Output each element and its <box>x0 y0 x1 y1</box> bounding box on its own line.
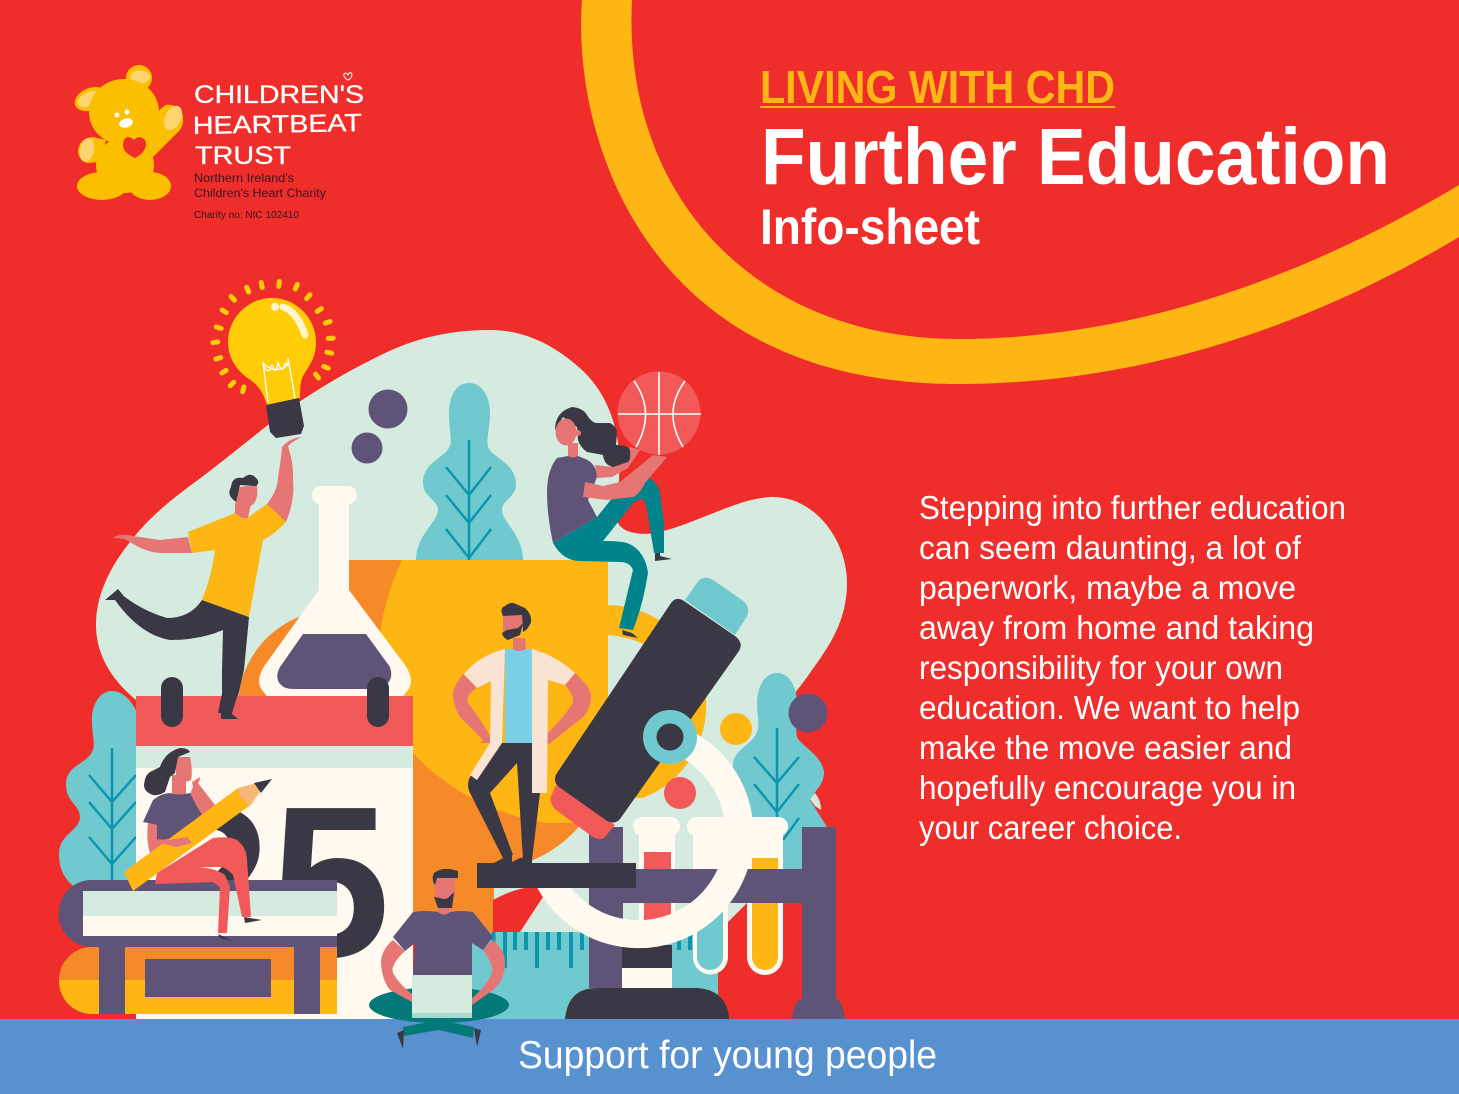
body paragraph: responsibility for your own <box>919 649 1283 686</box>
person: man with laptop <box>369 869 509 1049</box>
plant: right <box>733 673 827 869</box>
yellow half ring <box>608 605 706 798</box>
test tube: red <box>633 817 680 935</box>
floating circles <box>352 390 828 809</box>
microscope tube <box>555 599 741 823</box>
books <box>58 880 337 1014</box>
sub heading: Info-sheet <box>760 199 980 255</box>
body paragraph: can seem daunting, a lot of <box>919 529 1302 566</box>
microscope eyepiece <box>685 578 748 635</box>
test tubes <box>633 817 788 975</box>
red wedge <box>493 887 543 932</box>
bulb rays <box>213 282 333 392</box>
man leg and foot on calendar <box>218 694 238 719</box>
logo wordmark: TRUST <box>195 142 291 170</box>
background blob <box>96 330 847 932</box>
footer label: Support for young people <box>518 1034 937 1077</box>
person: man holding bulb <box>105 437 301 696</box>
person: woman with basketball <box>547 407 672 638</box>
logo wordmark: HEARTBEAT <box>193 109 362 140</box>
basketball <box>618 372 701 455</box>
body paragraph <box>919 489 1346 846</box>
body paragraph: away from home and taking <box>919 609 1314 646</box>
teal ground <box>472 932 718 1019</box>
test tube: teal <box>693 900 728 974</box>
microscope base <box>565 988 729 1019</box>
body paragraph: education. We want to help <box>919 689 1300 726</box>
test tube caps <box>687 817 788 869</box>
microscope focus knob <box>643 710 697 764</box>
plant: far left <box>59 691 140 887</box>
yellow swoosh arc <box>581 0 1459 384</box>
body paragraph: hopefully encourage you in <box>919 769 1296 806</box>
microscope objective <box>551 785 615 839</box>
body paragraph: paperwork, maybe a move <box>919 569 1296 606</box>
kicker heading: LIVING WITH CHD <box>760 61 1115 113</box>
microscope arm <box>549 742 739 934</box>
body paragraph: your career choice. <box>919 809 1182 846</box>
person: man in lab coat <box>453 603 591 863</box>
title block <box>760 61 1390 255</box>
logo strapline: Children's Heart Charity <box>194 186 326 200</box>
logo strapline: Northern Ireland's <box>194 171 294 185</box>
test tube: yellow <box>747 890 783 975</box>
cup: yellow fill <box>378 560 608 825</box>
logo wordmark: CHILDREN'S <box>194 81 364 109</box>
body paragraph: Stepping into further education <box>919 489 1346 526</box>
calendar date: 25 <box>151 761 390 1002</box>
logo strapline: Charity no: NIC 102410 <box>194 210 299 221</box>
logo strapline <box>194 171 326 221</box>
body paragraph: make the move easier and <box>919 729 1292 766</box>
person: woman with pencil <box>124 748 272 942</box>
calendar <box>136 677 413 1019</box>
microscope neck <box>622 945 672 988</box>
flask <box>259 486 411 700</box>
icon: light bulb <box>213 282 333 438</box>
logo wordmark <box>193 73 364 170</box>
footer band <box>0 1019 1459 1094</box>
orange circle behind flask <box>238 610 432 804</box>
logo: Children's Heartbeat Trust <box>71 65 364 221</box>
orange curve under yellow <box>533 823 577 860</box>
main heading: Further Education <box>761 112 1390 201</box>
microscope stage <box>477 863 636 888</box>
ruler ticks <box>494 932 690 968</box>
microscope stand <box>589 827 845 1019</box>
cup: orange base <box>349 560 600 933</box>
plant: top centre <box>416 383 523 560</box>
microscope <box>477 578 748 1019</box>
icon: teddy bear <box>71 65 186 200</box>
